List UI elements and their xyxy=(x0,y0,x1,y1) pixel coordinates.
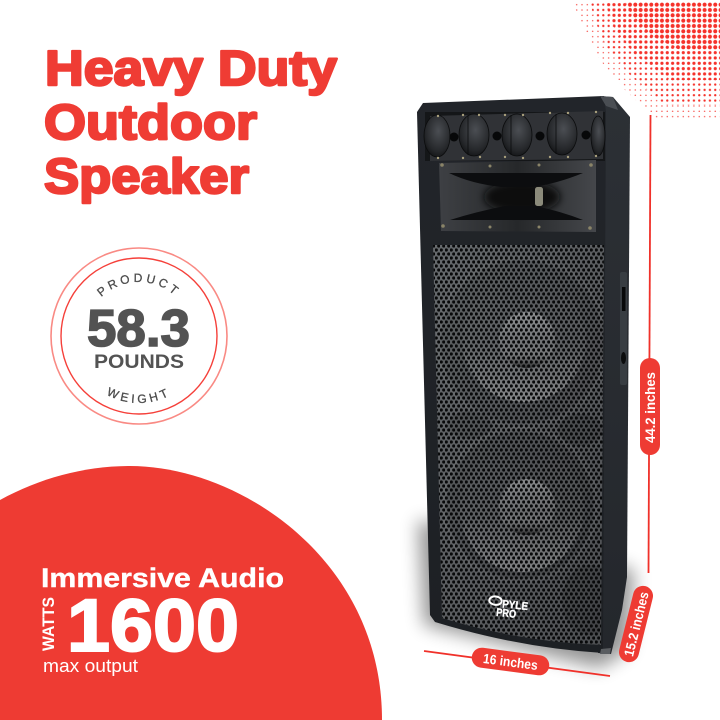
badge label: product: PRODUCT xyxy=(96,274,180,297)
cabinet side xyxy=(598,96,630,654)
max output label: max output xyxy=(43,656,138,676)
height dimension xyxy=(640,115,660,573)
red corner panel xyxy=(0,466,382,720)
badge label: weight: WEIGHT xyxy=(108,387,166,404)
width dimension: 16 inches xyxy=(482,651,539,673)
title: Speaker xyxy=(44,150,249,204)
title xyxy=(44,42,337,204)
width dimension xyxy=(424,646,610,677)
shadow xyxy=(418,520,634,668)
weight badge xyxy=(50,247,228,425)
brand logo: PYLE xyxy=(502,598,529,613)
brand logo xyxy=(487,596,529,622)
horn panel xyxy=(439,160,596,232)
cabinet front xyxy=(417,96,606,653)
badge value: 58.3: 58.3 xyxy=(87,300,190,358)
tweeter row xyxy=(424,111,605,161)
speaker xyxy=(417,96,634,668)
wattage value: 1600 xyxy=(67,584,239,667)
woofer lower xyxy=(444,429,596,581)
grille xyxy=(433,245,604,645)
watts label: WATTS xyxy=(40,597,58,651)
depth dimension: 15.2 inches xyxy=(621,590,652,658)
brand logo: PRO xyxy=(496,607,517,621)
height dimension: 44.2 inches xyxy=(643,372,658,443)
side handle plate xyxy=(620,272,627,385)
title: Heavy Duty xyxy=(45,42,337,96)
heading: immersive audio: Immersive Audio xyxy=(41,563,284,593)
badge unit: pounds: POUNDS xyxy=(94,351,184,373)
halftone dots xyxy=(575,2,720,118)
woofer upper xyxy=(440,261,584,402)
corner cap xyxy=(600,96,618,110)
title: Outdoor xyxy=(44,96,257,150)
